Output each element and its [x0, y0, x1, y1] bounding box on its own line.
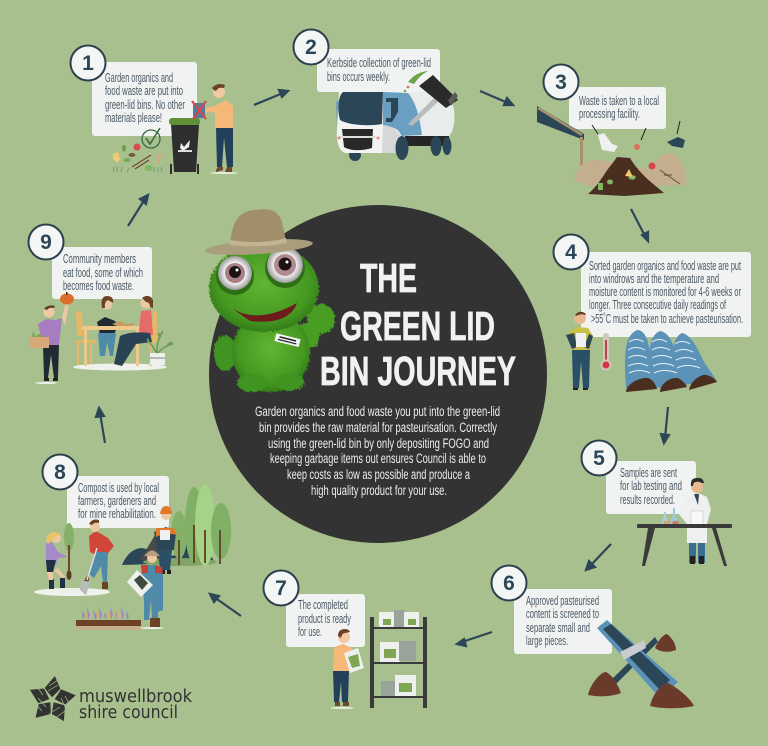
panel: step 6	[492, 566, 694, 708]
intro text block: keeping garbage items out ensures Council is able to	[270, 451, 486, 466]
title: BIN JOURNEY	[320, 348, 516, 394]
icon: five-petal star	[26, 675, 79, 726]
number badge: 4	[565, 241, 577, 264]
text card	[606, 461, 696, 514]
text card: Approved pasteurised	[526, 594, 599, 608]
icon: potted plant	[147, 331, 173, 365]
icon: trees and hills	[122, 484, 231, 566]
intro text block: high quality product for your use.	[311, 483, 447, 498]
text card: processing facility.	[579, 107, 640, 121]
figure: person carrying pumpkin and groceries	[29, 292, 74, 384]
text card: separate small and	[526, 621, 590, 635]
icon: thermometer	[600, 333, 612, 370]
number badge	[544, 64, 578, 100]
text card: farmers, gardeners and	[78, 494, 156, 508]
logo: Muswellbrook Shire Council	[26, 675, 193, 726]
title: GREEN LID	[340, 303, 495, 349]
arrow: step 1 to 2	[254, 90, 288, 105]
text card	[52, 247, 152, 299]
icon: compost windrows	[625, 330, 717, 392]
icon: conveyor and processing pile	[537, 106, 686, 196]
arrow: step 4 to 5	[661, 407, 669, 443]
arrow: step 3 to 4	[631, 209, 648, 241]
text card	[286, 594, 365, 647]
panel: step 8	[34, 454, 231, 630]
text card: Kerbside collection of green-lid	[327, 56, 431, 70]
text card: for use.	[298, 625, 322, 639]
number badge	[554, 234, 588, 270]
number badge: 6	[503, 572, 515, 595]
panel: step 7	[264, 570, 427, 709]
figure: person with clipboard	[566, 312, 593, 390]
number badge	[294, 30, 328, 64]
intro text block: Garden organics and food waste you put into the green-lid	[255, 404, 500, 419]
text card	[569, 87, 666, 129]
arrow: step 9 to 1	[128, 195, 148, 226]
text card	[317, 49, 440, 92]
number badge: 9	[40, 231, 52, 254]
number badge: 5	[593, 447, 605, 470]
figure: woman in hard hat	[154, 506, 177, 574]
figure: man digging	[80, 520, 114, 595]
panel: step 4	[554, 234, 751, 392]
text card: for mine rehabilitation.	[78, 507, 156, 521]
icon: screening machine and piles	[588, 620, 694, 708]
number badge	[70, 46, 106, 80]
text card: green-lid bins. No other	[105, 98, 185, 112]
text card: large pieces.	[526, 634, 568, 648]
text card: Waste is taken to a local	[579, 94, 659, 108]
text card: food waste are put into	[105, 84, 183, 98]
arrow: step 8 to 9	[96, 408, 105, 443]
text card	[514, 589, 612, 654]
intro text block: keep costs as low as possible and produce a	[287, 467, 470, 482]
icon: storage shelf with compost bags	[370, 610, 427, 708]
panel: step 2	[294, 30, 458, 161]
number badge	[492, 566, 526, 600]
arrow: step 7 to 8	[210, 594, 241, 616]
text card: results recorded.	[620, 493, 675, 507]
logo: Muswellbrook Shire Council: shire council	[79, 702, 178, 723]
text card: Garden organics and	[105, 71, 173, 85]
icon: correct items check and food scraps	[113, 128, 162, 172]
icon: collection truck	[336, 71, 458, 161]
logo: Muswellbrook Shire Council: muswellbrook	[79, 686, 193, 707]
text card: Compost is used by local	[78, 481, 159, 495]
hat	[205, 209, 313, 258]
text card: eat food, some of which	[63, 266, 143, 280]
number badge	[582, 440, 616, 476]
arrow: step 6 to 7	[457, 632, 492, 646]
text card	[92, 62, 197, 136]
number badge	[264, 570, 298, 606]
intro text block: bin provides the raw material for pasteurisation. Correctly	[259, 420, 497, 435]
arrow: step 5 to 6	[586, 544, 611, 570]
number badge: 1	[82, 52, 94, 75]
number badge	[42, 454, 78, 490]
figure: person with rubbish	[192, 84, 238, 174]
title: THE	[360, 255, 417, 301]
mascot: green furry character with hat	[205, 209, 335, 392]
number badge	[28, 224, 64, 260]
text card: Community members	[63, 252, 136, 266]
figure: table with two people	[73, 296, 167, 370]
text card: for lab testing and	[620, 479, 682, 493]
number badge: 2	[305, 36, 317, 59]
text card	[581, 252, 751, 337]
text card	[67, 476, 169, 528]
panel: step 9	[28, 224, 173, 384]
lab table	[637, 524, 732, 566]
panel: step 3	[537, 64, 686, 196]
eyes	[216, 247, 305, 295]
figure: woman planting tree	[34, 523, 110, 596]
figure: scientist at lab table	[660, 478, 711, 564]
text card: Samples are sent	[620, 466, 677, 480]
central circle panel	[209, 205, 547, 543]
number badge: 7	[275, 577, 287, 600]
text card: becomes food waste.	[63, 279, 134, 293]
panel: step 1	[70, 46, 238, 174]
arrow: step 2 to 3	[480, 91, 513, 105]
text card: The completed	[298, 598, 348, 612]
intro text block	[255, 404, 500, 498]
intro text block: using the green-lid bin by only depositing FOGO and	[268, 436, 489, 451]
figure: person holding bag	[330, 629, 364, 709]
text card: bins occurs weekly.	[327, 70, 390, 84]
text card: product is ready	[298, 612, 351, 626]
title	[320, 255, 516, 394]
number badge: 8	[54, 461, 66, 484]
text card: materials please!	[105, 111, 162, 125]
number badge: 3	[555, 71, 567, 94]
name tag	[274, 333, 301, 347]
mouth	[233, 303, 297, 322]
text card: content is screened to	[526, 607, 599, 621]
icon: garden bed with flowers	[76, 606, 141, 630]
figure: farmer with bag	[127, 550, 164, 629]
panel: step 5	[582, 440, 732, 566]
icon: green-lid bin	[169, 118, 200, 174]
